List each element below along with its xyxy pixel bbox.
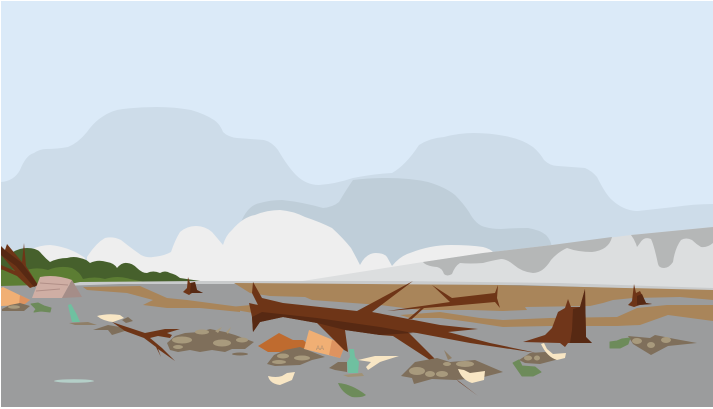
green bottle centre (343, 349, 364, 377)
shell far right (541, 343, 566, 360)
debris pile middle (267, 347, 325, 366)
twig under pile (456, 379, 478, 396)
box left (1, 287, 30, 306)
pile under shell far right (519, 352, 563, 364)
mud stripe left of trunk (230, 304, 300, 318)
small branch (112, 322, 180, 361)
hill shadow band (423, 237, 612, 276)
debris under bottle (69, 322, 97, 325)
big stump (523, 289, 592, 347)
pale puddle (54, 379, 94, 383)
ground (1, 282, 713, 407)
rock (32, 276, 82, 298)
rubble chip (122, 317, 133, 323)
orange carton flat (258, 333, 312, 352)
debris pile right (401, 350, 503, 384)
green leaf (338, 383, 366, 397)
light bush (1, 267, 150, 288)
pale shard (358, 356, 399, 370)
bushes (1, 248, 207, 288)
middle cloud (241, 178, 552, 290)
distant hill (290, 227, 713, 292)
green leaves far right (610, 338, 630, 348)
debris pile far right (628, 335, 697, 355)
rubble small (93, 325, 128, 335)
trunk shadow (252, 312, 413, 335)
small stump left (183, 277, 203, 295)
trunk and branches (249, 281, 537, 362)
mud band lower (400, 305, 713, 327)
pale shell left (97, 314, 124, 322)
left fallen tree (1, 243, 38, 288)
leaf clump left (31, 303, 51, 312)
hill shadow band right (631, 227, 713, 268)
upper right branch (387, 285, 500, 311)
main fallen tree (249, 281, 537, 362)
shell (268, 372, 295, 385)
small stump right (628, 284, 652, 307)
white clouds (30, 210, 500, 290)
debris pile centre-left (167, 327, 254, 356)
carton: AA (316, 346, 324, 352)
carton (304, 330, 345, 358)
mud main (234, 283, 713, 311)
green leaves right (513, 360, 541, 376)
dark bush (1, 248, 207, 288)
shell right (458, 369, 485, 383)
horizon strip (60, 281, 713, 291)
rubble near bottle (329, 362, 347, 372)
twig (408, 308, 424, 319)
back clouds (1, 107, 713, 300)
mud patch left (83, 286, 240, 312)
green bottle left (68, 304, 80, 322)
debris pile left (2, 303, 30, 311)
